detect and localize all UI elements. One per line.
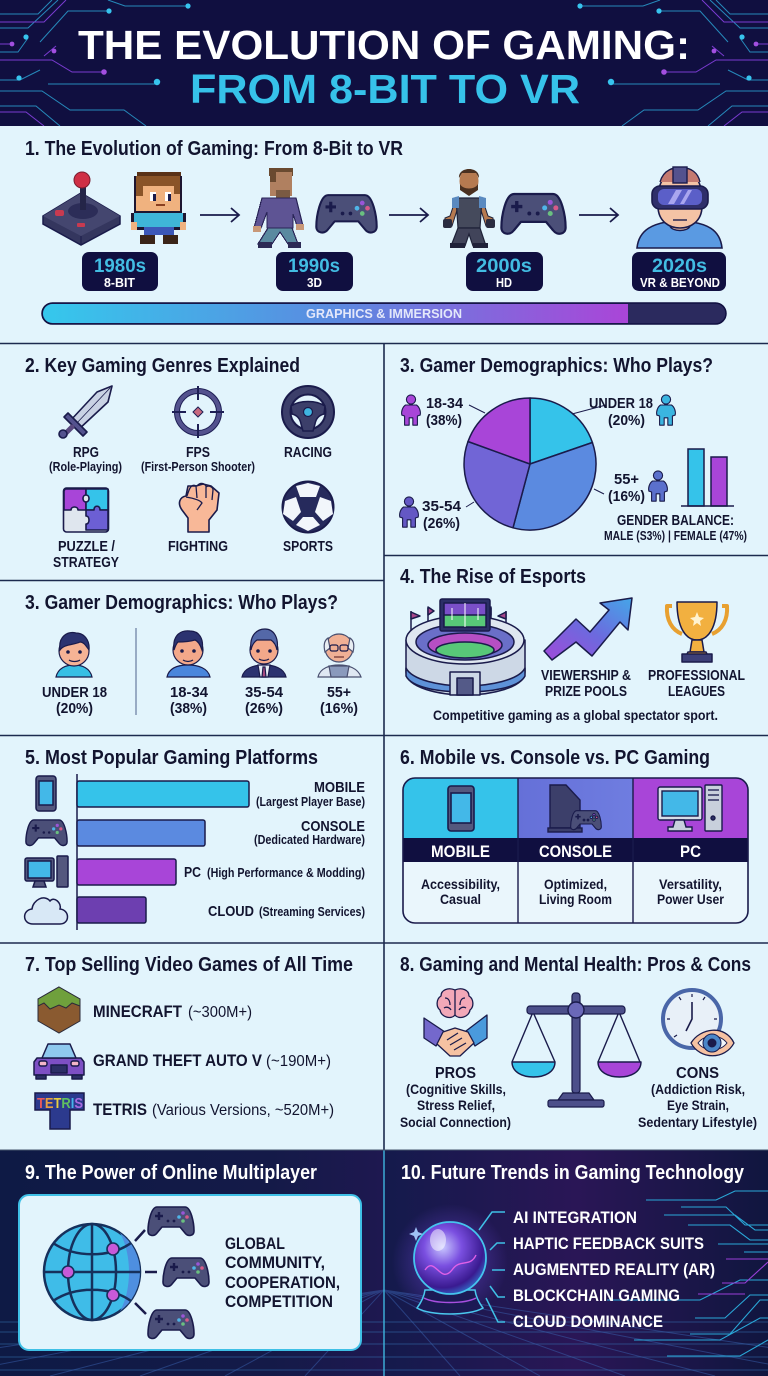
gender balance text: GENDER BALANCE: [617, 513, 734, 529]
label cons: Eye Strain, [667, 1097, 729, 1113]
label racing: RACING [284, 444, 332, 461]
label gta: (~190M+) [266, 1053, 331, 1070]
column text pc [657, 876, 724, 907]
label under 18: UNDER 18 [589, 395, 653, 412]
icon: table console [548, 785, 601, 832]
icon: crosshair [172, 386, 224, 438]
bar: mobile [77, 781, 249, 807]
icon: joystick [43, 172, 120, 245]
icon: globe [44, 1224, 140, 1320]
trend list: AI INTEGRATION [513, 1208, 637, 1227]
person icon 55+ [649, 471, 667, 501]
trend list [513, 1208, 715, 1331]
title: THE EVOLUTION OF GAMING: [78, 22, 690, 68]
label 18-34: 18-34 [426, 395, 464, 412]
bar: pc [77, 859, 176, 885]
column headings: MOBILE [431, 842, 490, 861]
circuit traces right [607, 1191, 768, 1356]
label cloud: CLOUD [208, 903, 254, 920]
label cloud: (Streaming Services) [259, 905, 365, 919]
label 55+: 55+ [614, 471, 639, 488]
label console: (Dedicated Hardware) [254, 833, 365, 847]
icon: crystal ball [392, 1204, 508, 1320]
label minecraft [93, 1002, 252, 1021]
panel: top selling games [25, 954, 353, 1129]
person icon 35-54 [400, 497, 418, 527]
icon: cloud [25, 898, 68, 924]
icon: steering wheel [282, 386, 334, 438]
bar: cloud [77, 897, 146, 923]
label puzzle [53, 538, 119, 571]
label pros: Stress Relief, [417, 1097, 495, 1113]
icons: controllers [148, 1207, 209, 1338]
heading 3: 3. Gamer Demographics: Who Plays? [25, 592, 338, 614]
icon: sword [59, 386, 112, 438]
label 18-34 [426, 395, 464, 429]
label under 18 [589, 395, 653, 429]
badge 2020s [632, 252, 726, 291]
label sports: SPORTS [283, 538, 333, 555]
badge 1990s: 1990s [288, 255, 340, 277]
label leagues: LEAGUES [668, 683, 725, 700]
avatar 35-54 [242, 629, 286, 677]
heading 2: 2. Key Gaming Genres Explained [25, 355, 300, 377]
arrow [389, 208, 428, 222]
trend list: BLOCKCHAIN GAMING [513, 1286, 680, 1305]
bar: console [77, 820, 205, 846]
divider [135, 628, 137, 715]
label 55+: (16%) [320, 700, 358, 717]
label puzzle: PUZZLE / [58, 538, 116, 555]
column text mobile: Casual [440, 891, 481, 907]
icon: car [34, 1044, 84, 1079]
badge 2000s [466, 252, 543, 291]
label cons [638, 1065, 757, 1130]
arrow [200, 208, 239, 222]
label 18-34: (38%) [426, 412, 462, 429]
multiplayer text: COMMUNITY, [225, 1253, 325, 1272]
icon: trophy [667, 602, 727, 662]
heading 6: 6. Mobile vs. Console vs. PC Gaming [400, 747, 710, 769]
label tetris: TETRIS [93, 1100, 147, 1119]
icon: phone [36, 776, 56, 811]
icon: clock and eye [663, 990, 734, 1056]
label 55+ [320, 684, 358, 717]
label 55+ [608, 471, 645, 505]
label FPS [141, 444, 255, 474]
icon: desktop pc [25, 856, 68, 887]
icon: 3D character [253, 168, 304, 248]
label under 18: (20%) [608, 412, 645, 429]
badge 1990s: 3D [307, 275, 322, 290]
panel: online multiplayer [19, 1162, 361, 1350]
label 35-54 [422, 498, 462, 532]
heading 7: 7. Top Selling Video Games of All Time [25, 954, 353, 976]
header banner [0, 0, 768, 126]
label 35-54: (26%) [245, 700, 283, 717]
title: FROM 8-BIT TO VR [190, 66, 580, 112]
label under 18: (20%) [56, 700, 93, 717]
axis [76, 774, 78, 930]
icon: gamepad [25, 819, 68, 846]
avatar 55+ [318, 634, 361, 677]
label puzzle: STRATEGY [53, 554, 119, 571]
panel: evolution timeline [25, 138, 726, 324]
label fighting: FIGHTING [168, 538, 228, 555]
multiplayer text [225, 1234, 340, 1311]
label leagues [648, 667, 745, 700]
label cons: CONS [676, 1065, 719, 1082]
connector lines [479, 1212, 505, 1322]
label cons: (Addiction Risk, [651, 1081, 745, 1097]
badge 2000s: 2000s [476, 255, 532, 277]
multiplayer text: COMPETITION [225, 1292, 333, 1311]
trend list: AUGMENTED REALITY (AR) [513, 1260, 715, 1279]
avatar under 18 [56, 633, 92, 677]
label under 18 [42, 684, 107, 717]
panel: key gaming genres [25, 355, 334, 571]
label 35-54: (26%) [423, 515, 460, 532]
icon: brain and handshake [424, 989, 487, 1056]
panel: mobile vs console vs pc [400, 747, 748, 923]
column headings [431, 842, 701, 861]
trend list: HAPTIC FEEDBACK SUITS [513, 1234, 704, 1253]
label pc: (High Performance & Modding) [207, 866, 365, 880]
label 35-54: 35-54 [245, 684, 284, 701]
label viewership: VIEWERSHIP & [541, 667, 631, 684]
gender balance text [604, 513, 747, 543]
label cloud [208, 903, 365, 920]
label RPG: (Role-Playing) [49, 460, 122, 474]
icon: tetris logo: TETRIS [37, 1095, 83, 1112]
panel: rise of esports [400, 566, 745, 723]
label FPS: (First-Person Shooter) [141, 460, 255, 474]
label mobile: (Largest Player Base) [256, 795, 365, 809]
label 18-34 [170, 684, 209, 717]
label RPG: RPG [73, 444, 99, 461]
comparison table [403, 778, 748, 923]
badge 2000s: HD [496, 275, 512, 290]
label minecraft: (~300M+) [188, 1004, 252, 1021]
badge 1980s: 1980s [94, 255, 146, 277]
person icon under 18 [657, 395, 675, 425]
label mobile [256, 779, 365, 809]
arrow [579, 208, 618, 222]
label 55+: 55+ [327, 684, 351, 701]
label pros: PROS [435, 1065, 476, 1082]
trend list: CLOUD DOMINANCE [513, 1312, 663, 1331]
label console [254, 818, 365, 847]
label 55+: (16%) [608, 488, 645, 505]
title [78, 22, 690, 112]
heading 9: 9. The Power of Online Multiplayer [25, 1162, 317, 1184]
label RPG [49, 444, 122, 474]
label FPS: FPS [186, 444, 210, 461]
icon: balance scale [512, 993, 641, 1107]
multiplayer text: COOPERATION, [225, 1273, 340, 1292]
label console: CONSOLE [301, 818, 365, 835]
icon: VR person [637, 167, 722, 248]
heading 1: 1. The Evolution of Gaming: From 8-Bit to VR [25, 138, 403, 160]
panel: mental health [400, 954, 757, 1130]
progress bar: graphics and immersion [42, 303, 726, 324]
column headings: CONSOLE [539, 842, 612, 861]
badge 1990s [276, 252, 353, 291]
label pc: PC [184, 864, 201, 881]
multiplayer text: GLOBAL [225, 1234, 285, 1253]
heading 5: 5. Most Popular Gaming Platforms [25, 747, 318, 769]
column text pc: Power User [657, 891, 724, 907]
label gta: GRAND THEFT AUTO V [93, 1051, 263, 1070]
icon: HD soldier [443, 169, 495, 248]
dark footer background with grid [0, 1150, 768, 1376]
heading 3 right: 3. Gamer Demographics: Who Plays? [400, 355, 713, 377]
person icon 18-34 [402, 395, 420, 425]
badge 1980s [82, 252, 158, 291]
panel: future trends [392, 1162, 745, 1331]
avatar 18-34 [167, 631, 210, 677]
column text mobile: Accessibility, [421, 876, 500, 892]
pie chart [464, 398, 596, 530]
label mobile: MOBILE [314, 779, 365, 796]
column text console: Optimized, [544, 876, 607, 892]
label pros [400, 1065, 511, 1130]
icon: growth arrow [544, 598, 632, 660]
panel: demographics pie [400, 355, 747, 543]
column headings: PC [680, 842, 701, 861]
label leagues: PROFESSIONAL [648, 667, 745, 684]
panel: demographics age groups [25, 592, 361, 717]
badge 2020s: VR & BEYOND [640, 275, 720, 290]
column text pc: Versatility, [659, 876, 722, 892]
gender bar chart [681, 449, 734, 506]
column text console: Living Room [539, 891, 612, 907]
label tetris [93, 1100, 334, 1119]
connector lines [135, 1230, 157, 1314]
icon: 1990s gamepad [315, 194, 378, 234]
label cons: Sedentary Lifestyle) [638, 1114, 757, 1130]
label under 18: UNDER 18 [42, 684, 107, 701]
icon: HD gamepad [500, 192, 567, 235]
column text console [539, 876, 612, 907]
label viewership: PRIZE POOLS [545, 683, 627, 700]
label viewership [541, 667, 631, 700]
column text mobile [421, 876, 500, 907]
label 35-54 [245, 684, 284, 717]
label 18-34: 18-34 [170, 684, 209, 701]
panel: gaming platforms [25, 747, 365, 930]
icon: stadium [406, 599, 525, 695]
icon: puzzle [64, 488, 108, 532]
page background panels [0, 126, 768, 1150]
icon: table pc [658, 785, 722, 831]
icon: table phone [448, 786, 474, 831]
label tetris: (Various Versions, ~520M+) [152, 1102, 334, 1119]
progress bar: graphics and immersion: GRAPHICS & IMMERSION [306, 306, 462, 321]
label pc [184, 864, 365, 881]
icon: minecraft block [38, 987, 80, 1033]
label minecraft: MINECRAFT [93, 1002, 183, 1021]
leader lines [466, 405, 606, 507]
multiplayer card [19, 1195, 361, 1350]
esports caption: Competitive gaming as a global spectator sport. [433, 707, 718, 723]
label pros: (Cognitive Skills, [406, 1081, 506, 1097]
heading 4: 4. The Rise of Esports [400, 566, 586, 588]
label 35-54: 35-54 [422, 498, 462, 515]
badge 2020s: 2020s [652, 255, 707, 277]
label 18-34: (38%) [170, 700, 207, 717]
badge 1980s: 8-BIT [104, 275, 135, 290]
label pros: Social Connection) [400, 1114, 511, 1130]
icon: tetris logo [35, 1093, 84, 1129]
icon: pixel boy [131, 172, 186, 244]
dividers [0, 344, 768, 1150]
icon: football [282, 482, 334, 532]
icon: fist [179, 483, 219, 532]
